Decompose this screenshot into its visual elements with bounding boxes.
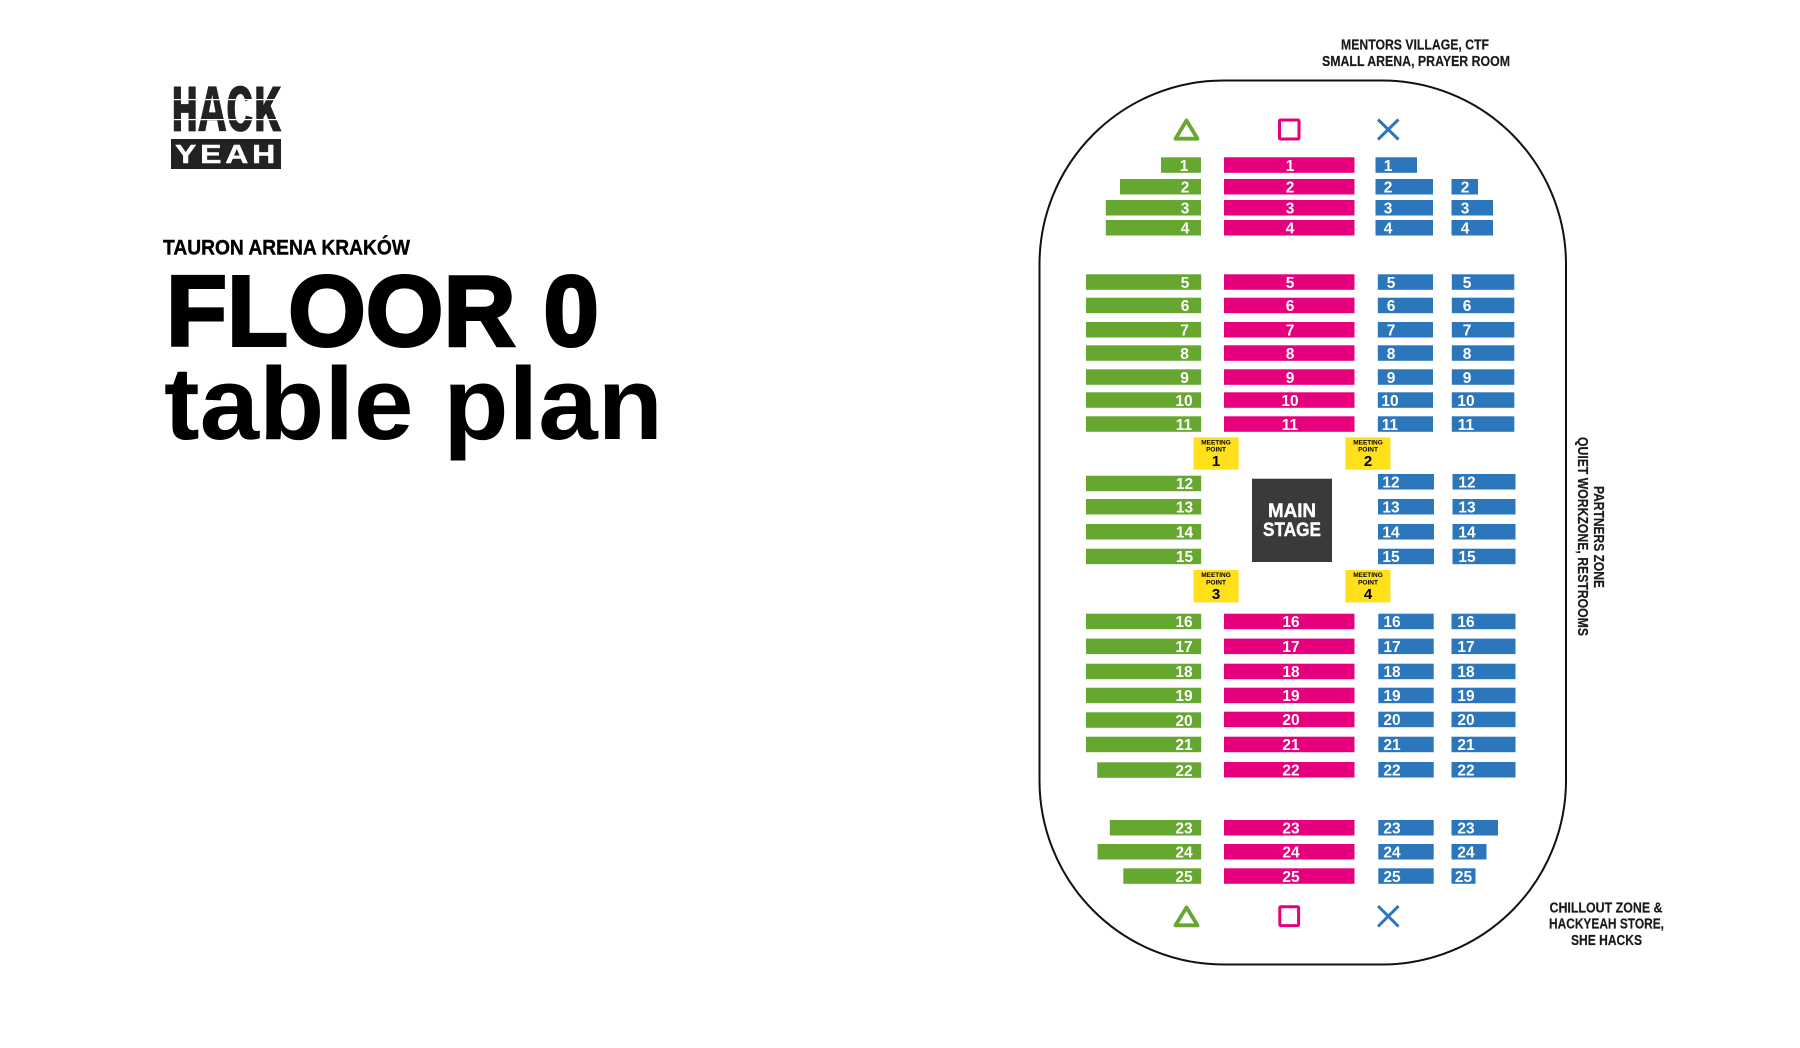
green table 6: 6 xyxy=(1181,298,1190,315)
outer blue table 24: 24 xyxy=(1457,844,1475,862)
outer blue table 15 xyxy=(1452,549,1516,566)
outer blue table 9 xyxy=(1452,369,1514,387)
green table 14 xyxy=(1086,524,1201,542)
outer blue table 12: 12 xyxy=(1458,474,1476,492)
logo: HackYeah xyxy=(171,76,282,169)
green table 18: 18 xyxy=(1175,664,1193,681)
blue table 21: 21 xyxy=(1383,737,1401,754)
icon: bottom cross xyxy=(1378,906,1398,926)
blue table 7: 7 xyxy=(1387,322,1395,340)
magenta table 9: 9 xyxy=(1286,370,1295,387)
outer blue table 16 xyxy=(1452,614,1516,631)
main stage xyxy=(1252,479,1332,562)
meeting point 1: 1 xyxy=(1212,453,1220,470)
outer blue table 16: 16 xyxy=(1457,614,1475,631)
magenta table 24 xyxy=(1224,844,1354,862)
outer blue table 25: 25 xyxy=(1455,869,1472,886)
magenta table 3: 3 xyxy=(1286,200,1295,218)
magenta table 22 xyxy=(1224,762,1354,780)
blue table 25: 25 xyxy=(1383,869,1401,886)
green table 4: 4 xyxy=(1181,220,1190,238)
blue table 9 xyxy=(1378,369,1433,387)
blue table 22: 22 xyxy=(1383,762,1401,780)
outer blue table 13 xyxy=(1452,499,1516,516)
meeting point 3: POINT xyxy=(1206,580,1226,586)
icon: top triangle xyxy=(1176,120,1198,139)
logo: HackYeah: YEAH xyxy=(175,141,279,169)
green table 2 xyxy=(1120,179,1201,196)
title: table plan: table plan xyxy=(164,346,663,461)
outer blue table 19 xyxy=(1452,688,1516,705)
green table 3 xyxy=(1106,200,1201,218)
outer blue table 19: 19 xyxy=(1457,688,1475,705)
magenta table 18 xyxy=(1224,664,1354,681)
blue table 22 xyxy=(1378,762,1434,780)
outer blue table 4: 4 xyxy=(1461,220,1470,238)
outer blue table 8: 8 xyxy=(1463,346,1472,363)
blue table 12 xyxy=(1378,474,1434,492)
label: partners zone: PARTNERS ZONE xyxy=(1590,486,1606,588)
icon: bottom triangle xyxy=(1176,908,1198,925)
magenta table 21 xyxy=(1224,737,1354,754)
meeting point 1: MEETING xyxy=(1201,440,1231,446)
magenta table 8: 8 xyxy=(1286,346,1295,363)
label: chillout zone xyxy=(1549,900,1664,949)
green table 12 xyxy=(1086,476,1201,493)
blue table 9: 9 xyxy=(1387,370,1396,387)
meeting point 2 xyxy=(1345,437,1390,470)
outer blue table 18: 18 xyxy=(1457,664,1475,681)
magenta table 6: 6 xyxy=(1286,298,1295,315)
label: chillout zone: SHE HACKS xyxy=(1571,933,1642,949)
blue table 5 xyxy=(1378,274,1433,292)
blue table 10 xyxy=(1378,392,1433,410)
green table 16 xyxy=(1086,614,1201,631)
outer blue table 17 xyxy=(1452,639,1516,656)
green table 21 xyxy=(1086,737,1201,754)
magenta table 1 xyxy=(1224,157,1354,175)
green table 14: 14 xyxy=(1176,524,1193,542)
magenta table 16: 16 xyxy=(1282,614,1300,631)
blue table 6 xyxy=(1378,298,1433,315)
outer blue table 21: 21 xyxy=(1457,737,1475,754)
blue table 18 xyxy=(1378,664,1434,681)
blue table 1 xyxy=(1376,157,1417,175)
blue table 7 xyxy=(1378,322,1433,340)
green table 10: 10 xyxy=(1175,393,1193,410)
outer blue table 10: 10 xyxy=(1457,393,1475,410)
green table 2: 2 xyxy=(1181,180,1189,196)
meeting point 3: MEETING xyxy=(1201,572,1231,579)
green table 15: 15 xyxy=(1176,549,1193,566)
outer blue table 2: 2 xyxy=(1461,180,1469,196)
magenta table 4 xyxy=(1224,220,1354,238)
green table 19 xyxy=(1086,688,1201,705)
outer blue table 12 xyxy=(1452,474,1516,492)
magenta table 24: 24 xyxy=(1282,844,1300,862)
blue table 21 xyxy=(1378,737,1434,754)
outer blue table 21 xyxy=(1452,737,1516,754)
blue table 10: 10 xyxy=(1381,393,1399,410)
label: quiet workzone: QUIET WORKZONE, RESTROOMS xyxy=(1574,437,1590,636)
outer blue table 7: 7 xyxy=(1463,322,1471,340)
green table 5: 5 xyxy=(1181,275,1190,292)
green table 7 xyxy=(1086,322,1201,340)
blue table 23: 23 xyxy=(1383,820,1401,838)
green table 22 xyxy=(1097,762,1201,780)
blue table 17: 17 xyxy=(1383,639,1401,656)
outer blue table 10 xyxy=(1452,392,1514,410)
green table 1 xyxy=(1161,157,1201,175)
subtitle: venue: TAURON ARENA KRAKÓW xyxy=(163,234,411,260)
outer blue table 18 xyxy=(1452,664,1516,681)
magenta table 2: 2 xyxy=(1286,180,1294,196)
blue table 3: 3 xyxy=(1384,200,1393,218)
meeting point 4: POINT xyxy=(1358,580,1378,586)
green table 25: 25 xyxy=(1175,869,1193,886)
green table 12: 12 xyxy=(1176,476,1193,493)
outer blue table 22: 22 xyxy=(1457,762,1475,780)
blue table 8: 8 xyxy=(1387,346,1396,363)
magenta table 25: 25 xyxy=(1282,869,1300,886)
outer blue table 5: 5 xyxy=(1463,275,1472,292)
outer blue table 5 xyxy=(1452,274,1514,292)
green table 13 xyxy=(1086,499,1201,516)
label: chillout zone: HACKYEAH STORE, xyxy=(1549,916,1664,932)
blue table 24 xyxy=(1378,844,1434,862)
blue table 2: 2 xyxy=(1384,180,1392,196)
arena outline xyxy=(1040,80,1566,964)
green table 17: 17 xyxy=(1175,639,1193,656)
green table 23 xyxy=(1110,820,1201,838)
meeting point 3: 3 xyxy=(1212,586,1220,603)
blue table 8 xyxy=(1378,345,1433,363)
blue table 16 xyxy=(1378,614,1434,631)
magenta table 11: 11 xyxy=(1282,417,1299,434)
magenta table 11 xyxy=(1224,416,1354,434)
green table 21: 21 xyxy=(1175,737,1193,754)
green table 4 xyxy=(1106,220,1201,238)
green table 6 xyxy=(1086,298,1201,315)
magenta table 1: 1 xyxy=(1286,158,1295,175)
magenta table 23 xyxy=(1224,820,1354,838)
magenta tables column xyxy=(1224,157,1354,886)
outer blue table 23: 23 xyxy=(1457,820,1475,838)
blue table 12: 12 xyxy=(1382,474,1400,492)
outer blue table 15: 15 xyxy=(1458,549,1476,566)
outer blue table 20: 20 xyxy=(1457,712,1475,729)
blue table 14: 14 xyxy=(1382,524,1400,542)
label: chillout zone: CHILLOUT ZONE & xyxy=(1550,900,1663,916)
outer blue table 22 xyxy=(1452,762,1516,780)
green table 15 xyxy=(1086,549,1201,566)
outer blue table 7 xyxy=(1452,322,1514,340)
outer blue table 14 xyxy=(1452,524,1516,542)
outer blue table 3: 3 xyxy=(1461,200,1470,218)
meeting point 3 xyxy=(1194,570,1239,603)
blue table 25 xyxy=(1378,868,1434,886)
green table 11 xyxy=(1086,416,1201,434)
green table 23: 23 xyxy=(1175,820,1193,838)
outer blue table 11 xyxy=(1452,416,1514,434)
icon: bottom square xyxy=(1280,907,1299,926)
outer blue table 14: 14 xyxy=(1458,524,1476,542)
magenta table 6 xyxy=(1224,298,1354,315)
green table 22: 22 xyxy=(1175,763,1193,780)
green table 24: 24 xyxy=(1175,844,1193,862)
green table 8 xyxy=(1086,345,1201,363)
green table 13: 13 xyxy=(1176,500,1193,516)
green table 16: 16 xyxy=(1175,614,1193,631)
green table 20: 20 xyxy=(1175,713,1193,730)
magenta table 8 xyxy=(1224,345,1354,363)
blue table 15 xyxy=(1378,549,1434,566)
magenta table 5: 5 xyxy=(1286,275,1295,292)
magenta table 25 xyxy=(1224,868,1354,886)
magenta table 16 xyxy=(1224,614,1354,631)
blue table 24: 24 xyxy=(1383,844,1401,862)
blue table 16: 16 xyxy=(1383,614,1401,631)
blue table 20 xyxy=(1378,712,1434,729)
blue tables inner column xyxy=(1376,157,1434,886)
magenta table 20 xyxy=(1224,712,1354,729)
logo: HackYeah: HACK xyxy=(171,76,282,152)
blue table 17 xyxy=(1378,639,1434,656)
outer blue table 17: 17 xyxy=(1457,639,1475,656)
green table 17 xyxy=(1086,639,1201,656)
meeting point 4 xyxy=(1345,570,1390,603)
blue table 15: 15 xyxy=(1382,549,1400,566)
meeting point 2: POINT xyxy=(1358,446,1378,454)
green tables column xyxy=(1086,157,1201,886)
magenta table 5 xyxy=(1224,274,1354,292)
blue table 2 xyxy=(1376,179,1433,196)
blue table 19: 19 xyxy=(1383,688,1401,705)
blue table 13 xyxy=(1378,499,1434,516)
magenta table 10: 10 xyxy=(1281,393,1299,410)
green table 18 xyxy=(1086,664,1201,681)
outer blue table 2 xyxy=(1452,179,1478,196)
outer blue table 13: 13 xyxy=(1458,500,1476,516)
magenta table 23: 23 xyxy=(1282,820,1300,838)
blue table 13: 13 xyxy=(1382,500,1400,516)
label: mentors village: MENTORS VILLAGE, CTF xyxy=(1341,38,1489,54)
magenta table 10 xyxy=(1224,392,1354,410)
blue table 3 xyxy=(1376,200,1433,218)
green table 11: 11 xyxy=(1176,417,1193,434)
main stage: MAIN xyxy=(1268,500,1316,522)
magenta table 7 xyxy=(1224,322,1354,340)
blue table 1: 1 xyxy=(1384,158,1393,175)
outer blue table 3 xyxy=(1452,200,1493,218)
meeting point 1: POINT xyxy=(1206,446,1226,454)
green table 7: 7 xyxy=(1180,322,1189,340)
label: mentors village: SMALL ARENA, PRAYER ROOM xyxy=(1322,54,1510,70)
blue tables outer column xyxy=(1452,179,1516,886)
green table 19: 19 xyxy=(1175,688,1193,705)
green table 24 xyxy=(1098,844,1201,862)
magenta table 19: 19 xyxy=(1282,688,1300,705)
green table 25 xyxy=(1123,868,1201,886)
magenta table 7: 7 xyxy=(1286,322,1294,340)
outer blue table 20 xyxy=(1452,712,1516,729)
outer blue table 6 xyxy=(1452,298,1514,315)
green table 5 xyxy=(1086,274,1201,292)
green table 3: 3 xyxy=(1181,200,1190,218)
blue table 18: 18 xyxy=(1383,664,1401,681)
magenta table 2 xyxy=(1224,179,1354,196)
magenta table 4: 4 xyxy=(1286,220,1295,238)
green table 10 xyxy=(1086,392,1201,410)
outer blue table 11: 11 xyxy=(1458,417,1475,434)
blue table 11: 11 xyxy=(1382,417,1399,434)
blue table 14 xyxy=(1378,524,1434,542)
green table 9 xyxy=(1086,369,1201,387)
meeting point 4: 4 xyxy=(1364,586,1373,603)
outer blue table 9: 9 xyxy=(1463,370,1472,387)
label: mentors village xyxy=(1322,38,1510,70)
magenta table 21: 21 xyxy=(1282,737,1300,754)
magenta table 17: 17 xyxy=(1282,639,1300,656)
blue table 4 xyxy=(1376,220,1433,238)
magenta table 20: 20 xyxy=(1282,712,1300,729)
blue table 6: 6 xyxy=(1387,298,1396,315)
magenta table 17 xyxy=(1224,639,1354,656)
blue table 11 xyxy=(1378,416,1433,434)
meeting point 1 xyxy=(1194,437,1239,470)
blue table 19 xyxy=(1378,688,1434,705)
blue table 20: 20 xyxy=(1383,712,1401,729)
meeting point 2: MEETING xyxy=(1353,440,1383,446)
meeting point 4: MEETING xyxy=(1353,572,1383,579)
blue table 4: 4 xyxy=(1384,220,1393,238)
outer blue table 8 xyxy=(1452,345,1514,363)
outer blue table 25 xyxy=(1452,868,1476,886)
blue table 5: 5 xyxy=(1387,275,1396,292)
magenta table 19 xyxy=(1224,688,1354,705)
blue table 23 xyxy=(1378,820,1434,838)
outer blue table 4 xyxy=(1452,220,1493,238)
magenta table 18: 18 xyxy=(1282,664,1300,681)
green table 1: 1 xyxy=(1180,158,1189,175)
icon: top square xyxy=(1280,120,1299,139)
main stage: STAGE xyxy=(1263,519,1321,541)
outer blue table 6: 6 xyxy=(1463,298,1472,315)
magenta table 9 xyxy=(1224,369,1354,387)
title: FLOOR 0: FLOOR 0 xyxy=(166,256,599,368)
magenta table 3 xyxy=(1224,200,1354,218)
green table 9: 9 xyxy=(1180,370,1189,387)
magenta table 22: 22 xyxy=(1282,762,1300,780)
outer blue table 24 xyxy=(1452,844,1486,862)
icon: top cross xyxy=(1378,120,1398,140)
outer blue table 23 xyxy=(1452,820,1498,838)
green table 20 xyxy=(1086,712,1201,730)
meeting point 2: 2 xyxy=(1364,453,1372,470)
green table 8: 8 xyxy=(1180,346,1189,363)
